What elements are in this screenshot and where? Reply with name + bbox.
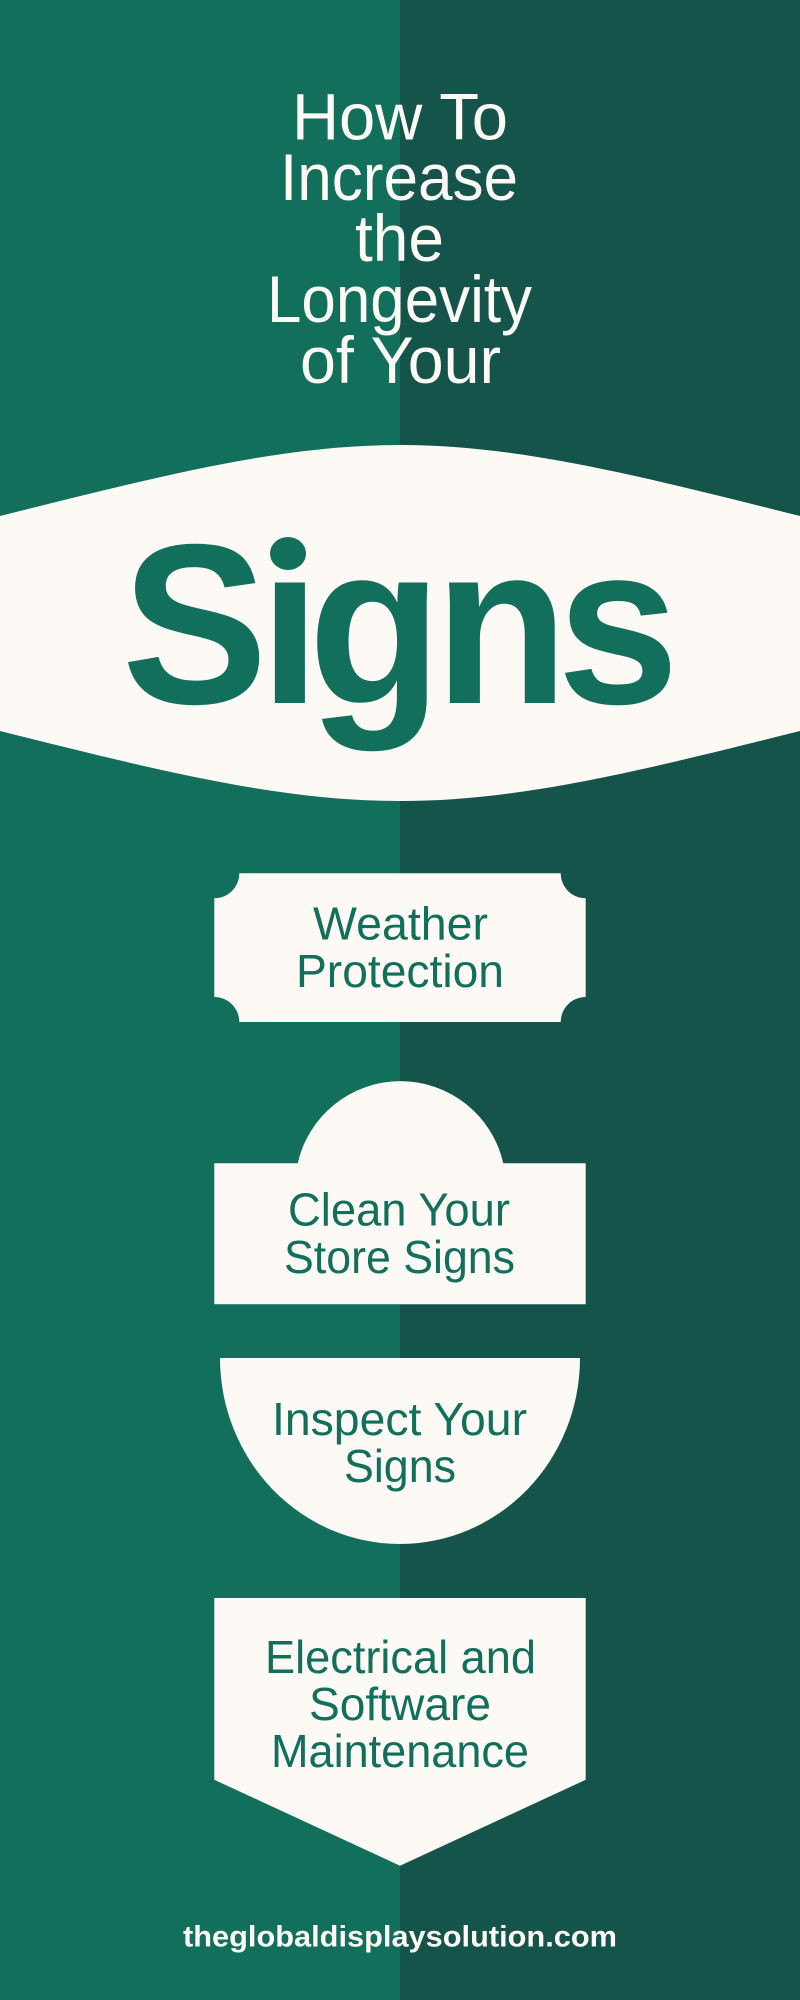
- panel text: Electrical and: [265, 1631, 536, 1683]
- panel text: Store Signs: [284, 1231, 515, 1283]
- panel: electrical and software maintenance: [214, 1598, 586, 1866]
- panel: clean your store signs: [214, 1081, 586, 1304]
- title: the: [355, 201, 444, 275]
- banner: Signs: [0, 445, 800, 801]
- panel text: [265, 1631, 536, 1777]
- panel text: [284, 1184, 515, 1283]
- panel text: [296, 898, 504, 997]
- panel text: Signs: [344, 1440, 456, 1492]
- footer website: theglobaldisplaysolution.com: [183, 1920, 617, 1954]
- title: [267, 80, 532, 397]
- panel text: Maintenance: [271, 1725, 529, 1777]
- panel text: Clean Your: [288, 1184, 510, 1236]
- panel text: Software: [309, 1678, 491, 1730]
- panel text: [272, 1393, 527, 1492]
- heading round i-dot: [270, 537, 306, 570]
- banner heading: Signs: [122, 498, 679, 752]
- title: of Your: [300, 323, 501, 397]
- title: How To: [292, 80, 508, 154]
- panel text: Weather: [313, 898, 488, 950]
- heading i-dot mask: [265, 530, 311, 572]
- panel: inspect your signs: [220, 1358, 580, 1544]
- panel text: Protection: [296, 945, 504, 997]
- title: Increase: [280, 140, 518, 214]
- panel text: Inspect Your: [272, 1393, 527, 1445]
- panel: weather protection: [214, 873, 586, 1022]
- title: Longevity: [267, 262, 532, 336]
